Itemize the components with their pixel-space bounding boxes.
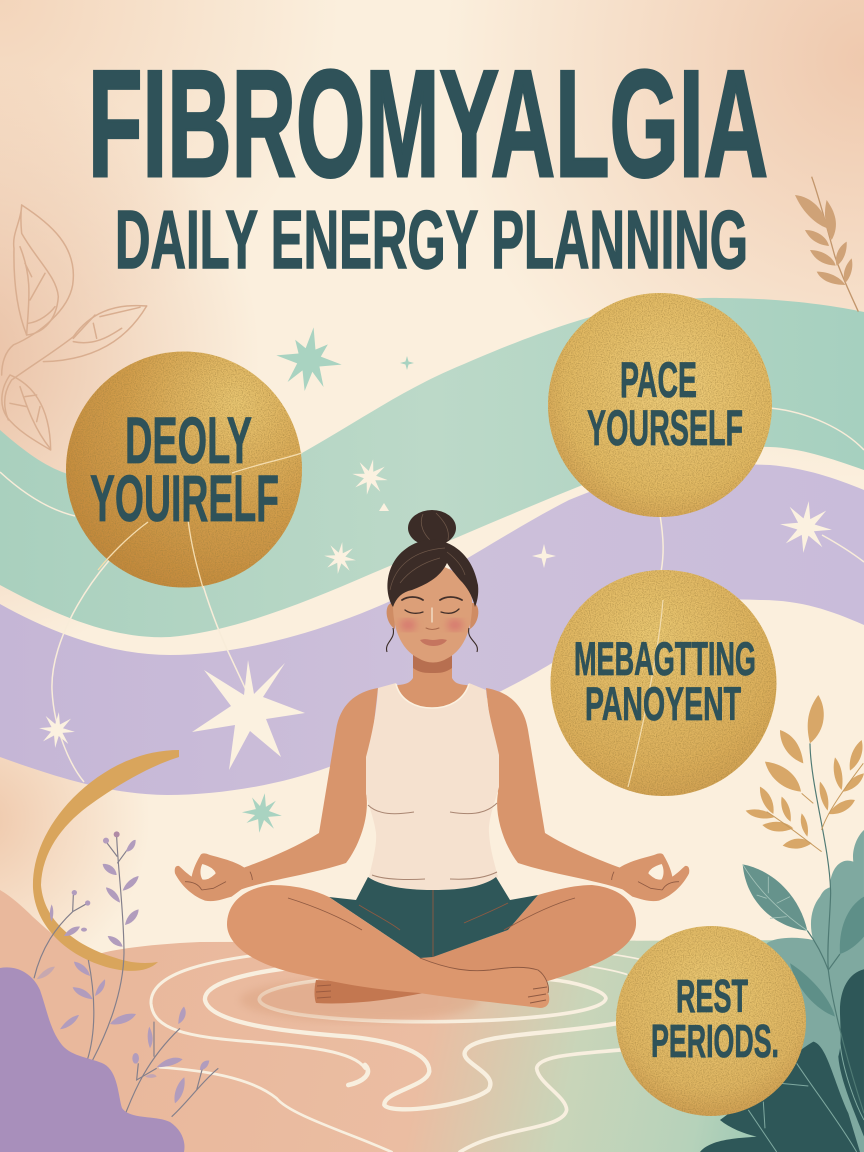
gold circle: rest periods: REST	[676, 970, 748, 1022]
right thigh	[420, 885, 636, 992]
purple wave band	[0, 464, 864, 795]
tank top	[366, 683, 499, 890]
gold circle: pace yourself: PACE	[620, 352, 697, 408]
bun	[408, 510, 456, 546]
lavender plants	[34, 831, 218, 1117]
plants bottom right	[700, 695, 864, 1152]
gold circle: mebagtting panoyent: PANOYENT	[585, 677, 741, 730]
star: tiny triangle	[379, 503, 389, 511]
right hand	[612, 853, 689, 901]
front leg	[227, 885, 549, 1008]
dark leaves	[700, 1042, 860, 1152]
purple bush bottom left	[0, 967, 184, 1152]
neck and chest	[392, 650, 472, 716]
leg outlines	[288, 890, 575, 1003]
stems	[807, 743, 864, 1113]
star: cream sparkle on purple	[532, 544, 556, 568]
left arm	[234, 688, 378, 892]
right arm	[486, 688, 630, 892]
left hand	[175, 853, 252, 901]
star: large mint	[272, 323, 346, 396]
gold circle: deoly youirelf: DEOLY	[125, 403, 252, 477]
gold circle: pace yourself: YOURSELF	[587, 400, 743, 456]
facial features	[402, 597, 462, 646]
star: cream lower mint	[322, 540, 358, 576]
star: mint lower	[239, 790, 285, 836]
star: cream on mint	[349, 456, 391, 498]
thin flow lines	[0, 408, 864, 782]
gold circle: rest periods	[616, 926, 806, 1116]
gold brush arc	[33, 750, 179, 971]
gold circle: mebagtting panoyent	[550, 570, 776, 796]
shorts	[329, 877, 538, 958]
star: cream left	[37, 710, 77, 750]
water swirl lines	[151, 953, 640, 1152]
teal bush	[767, 830, 864, 1152]
hair strands	[387, 548, 477, 652]
top seams	[368, 803, 497, 880]
gold circle: pace yourself	[548, 293, 772, 517]
ears	[387, 603, 478, 629]
sprig top right	[795, 177, 858, 312]
leaf veins on dark	[748, 1043, 864, 1152]
gold circle: deoly youirelf	[66, 352, 302, 588]
top details	[396, 684, 469, 708]
tan sprigs	[746, 695, 864, 849]
star: large cream	[192, 660, 305, 770]
woman meditating	[175, 510, 689, 1008]
hair	[387, 540, 478, 607]
decorative outline leaves top left	[2, 205, 147, 450]
star: cream right	[777, 498, 835, 556]
gold circle: deoly youirelf: YOUIRELF	[90, 461, 279, 535]
ground with water	[0, 890, 864, 1152]
neck shadow	[413, 655, 452, 673]
back foot	[314, 980, 423, 1003]
cheeks	[400, 619, 463, 631]
face	[393, 565, 472, 662]
back foot toes	[316, 985, 331, 998]
star: small mint sparkle	[400, 356, 414, 370]
mint wave band	[0, 298, 864, 637]
sand shadow under figure	[240, 978, 480, 1022]
teal leaf	[743, 864, 807, 931]
